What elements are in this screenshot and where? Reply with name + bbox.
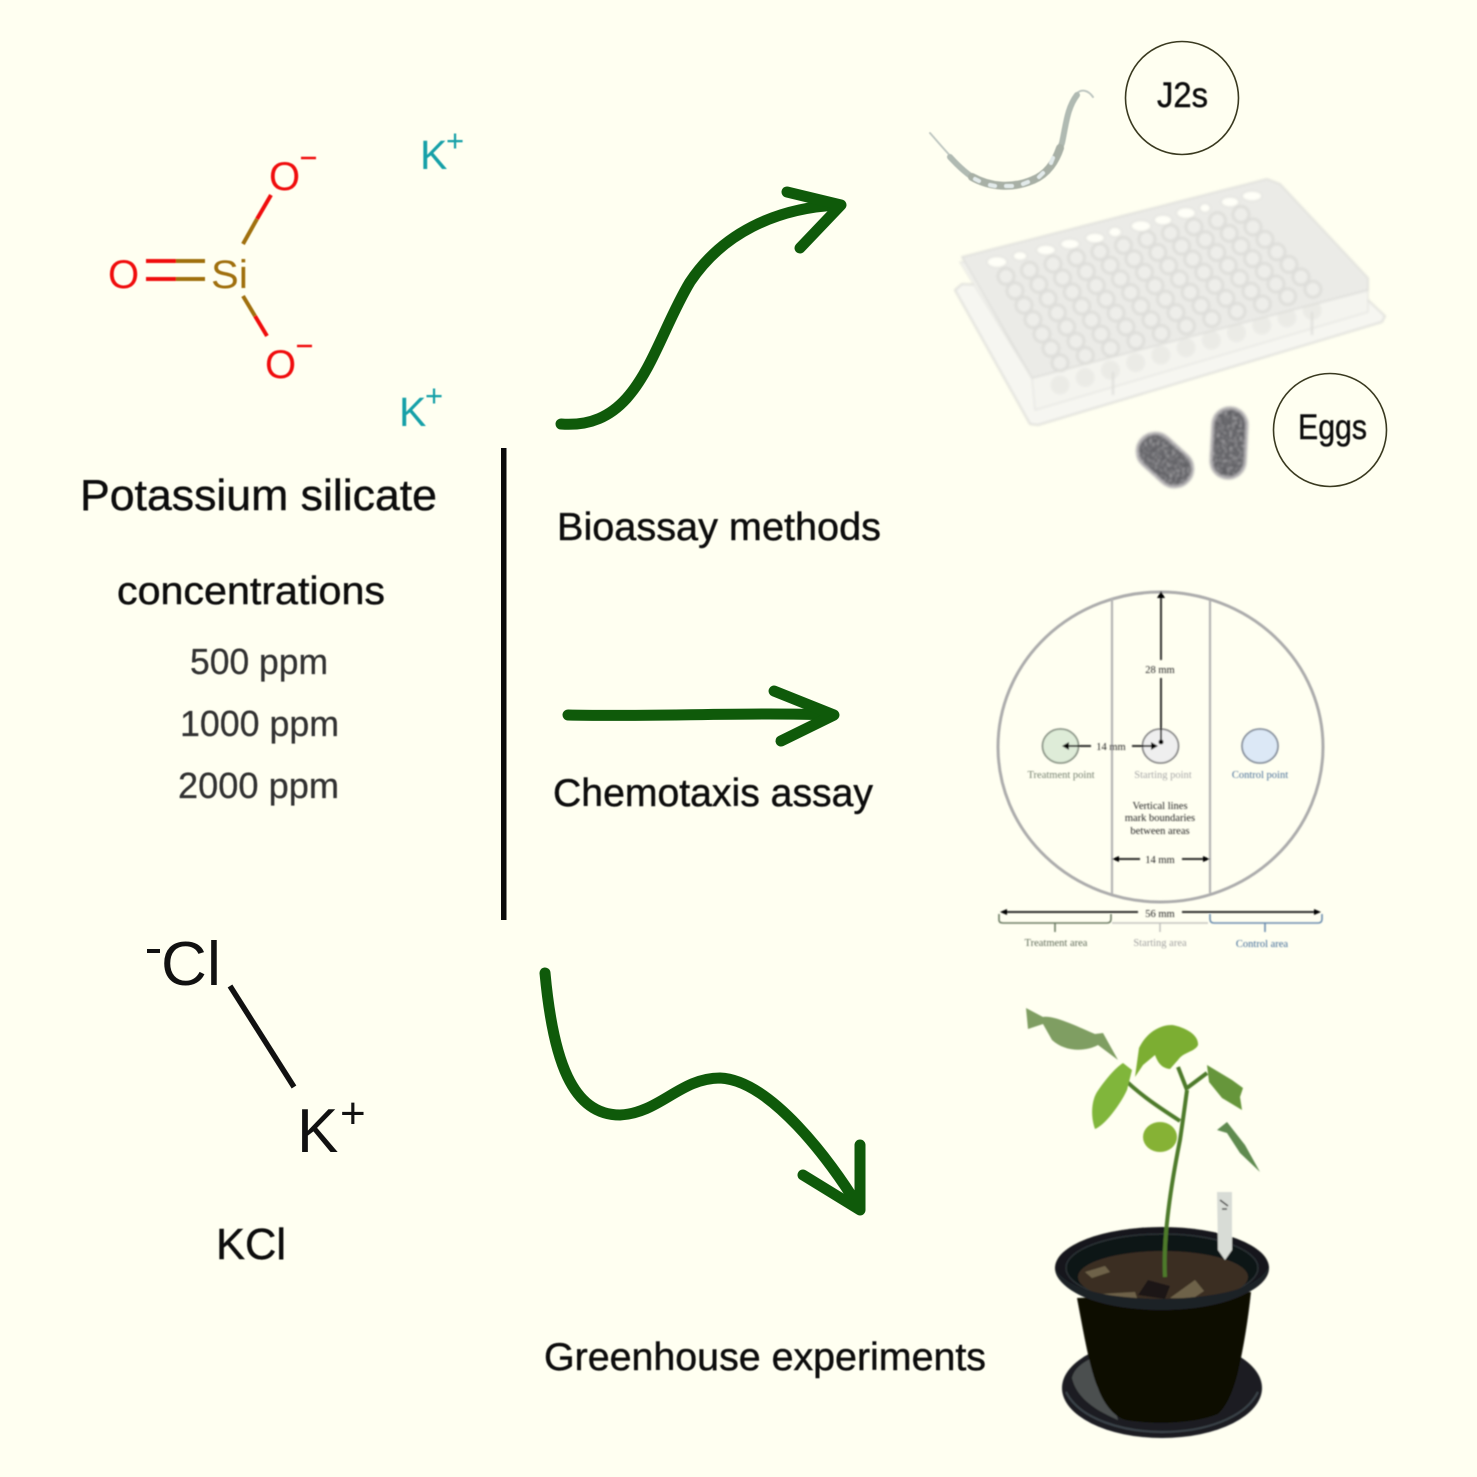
arrow to bioassay methods [561, 192, 841, 424]
label 14 mm width: 14 mm [1145, 855, 1175, 866]
atom Si: Si [211, 253, 248, 297]
starting point [1142, 729, 1178, 763]
minus sign [147, 949, 160, 953]
minus lower [297, 345, 312, 347]
label 14 mm horizontal: 14 mm [1096, 742, 1126, 753]
arrow to chemotaxis assay [568, 691, 834, 741]
chemical structure: potassium silicate [108, 123, 464, 435]
starting bracket [1112, 923, 1208, 932]
egg right [1210, 407, 1248, 479]
first row bright wells [987, 191, 1262, 268]
soil [1078, 1251, 1248, 1303]
badge: J2s: J2s [1157, 76, 1208, 115]
control bracket [1210, 914, 1322, 932]
well rows outer [1006, 208, 1338, 363]
diagram: chemotaxis petri dish [998, 591, 1323, 950]
dimension lines [1002, 593, 1319, 912]
plus lower: + [425, 378, 443, 413]
label: greenhouse experiments: Greenhouse experiments [544, 1336, 986, 1379]
vertical divider [501, 448, 506, 920]
label 28 mm: 28 mm [1145, 665, 1175, 676]
plant label [1217, 1192, 1232, 1260]
plate base [955, 284, 1385, 425]
saucer [1062, 1338, 1262, 1438]
saucer highlight [1072, 1355, 1118, 1420]
leaf small [1143, 1122, 1177, 1152]
soil debris [1085, 1266, 1204, 1299]
heading: concentrations: concentrations [117, 570, 385, 613]
icon: 96-well plate [955, 179, 1385, 425]
plate top surface [962, 179, 1368, 378]
badge: J2s [1126, 42, 1238, 154]
icon: potted plant [1026, 1008, 1269, 1438]
leaf top left [1026, 1008, 1118, 1060]
plate ribs [1113, 312, 1312, 395]
treatment point [1042, 729, 1078, 763]
chlorine atom: Cl [161, 930, 221, 999]
label starting area: Starting area [1133, 938, 1187, 949]
label KCl: KCl [216, 1220, 286, 1269]
dish outline [998, 592, 1323, 902]
icon: nematode eggs [1130, 407, 1248, 494]
treatment bracket [999, 914, 1111, 932]
plus upper: + [446, 123, 464, 158]
label writing [1220, 1200, 1228, 1209]
label: chemotaxis assay: Chemotaxis assay [553, 772, 873, 815]
concentration 500 ppm: 500 ppm [190, 641, 328, 682]
potassium ion lower: K [399, 389, 426, 435]
arrow to greenhouse experiments [545, 973, 860, 1210]
label 56 mm: 56 mm [1145, 909, 1175, 920]
concentration 2000 ppm: 2000 ppm [178, 765, 339, 806]
atom O double-bonded: O [108, 253, 139, 297]
leaf left [1092, 1063, 1132, 1129]
oxygen double bond [146, 195, 271, 336]
leaf far right [1217, 1122, 1260, 1172]
leaf top centre [1135, 1025, 1198, 1077]
label starting point: Starting point [1134, 770, 1192, 781]
atom O minus lower: O [265, 343, 296, 387]
icon: nematode J2 [930, 91, 1093, 186]
area boundaries [1112, 598, 1210, 894]
pot rim front [1055, 1266, 1269, 1310]
badge: Eggs: Eggs [1298, 408, 1367, 447]
minus upper [301, 157, 316, 159]
label treatment area: Treatment area [1025, 938, 1088, 949]
label treatment point: Treatment point [1028, 770, 1095, 781]
well rows inner [1006, 208, 1338, 363]
stem and petioles [1122, 1067, 1207, 1277]
atom O minus upper: O [269, 155, 300, 199]
chemical structure: KCl [147, 930, 366, 1166]
note: vertical lines: Vertical lines [1132, 801, 1188, 812]
heading: potassium silicate: Potassium silicate [80, 471, 437, 520]
pot body [1077, 1292, 1251, 1423]
control point [1242, 729, 1278, 763]
label control point: Control point [1232, 770, 1288, 781]
concentration 1000 ppm: 1000 ppm [180, 703, 339, 744]
soil dark patch [1138, 1280, 1170, 1299]
saucer rim line [1066, 1392, 1258, 1432]
label control area: Control area [1236, 939, 1288, 950]
plate side [960, 262, 1368, 410]
plus sign: + [340, 1089, 366, 1138]
potassium atom: K [297, 1097, 338, 1166]
dimension arrowheads [1000, 591, 1321, 915]
note: vertical lines: mark boundaries [1125, 813, 1195, 824]
potassium ion upper: K [420, 132, 447, 178]
badge: Eggs [1274, 374, 1386, 486]
leaf right [1207, 1065, 1243, 1110]
note: vertical lines: between areas [1130, 826, 1190, 837]
pot rim [1055, 1227, 1269, 1309]
pot inner wall [1066, 1234, 1258, 1302]
label: bioassay methods: Bioassay methods [557, 506, 881, 549]
egg left [1130, 426, 1200, 494]
front well bottoms [1060, 303, 1337, 385]
ionic bond [230, 986, 294, 1087]
